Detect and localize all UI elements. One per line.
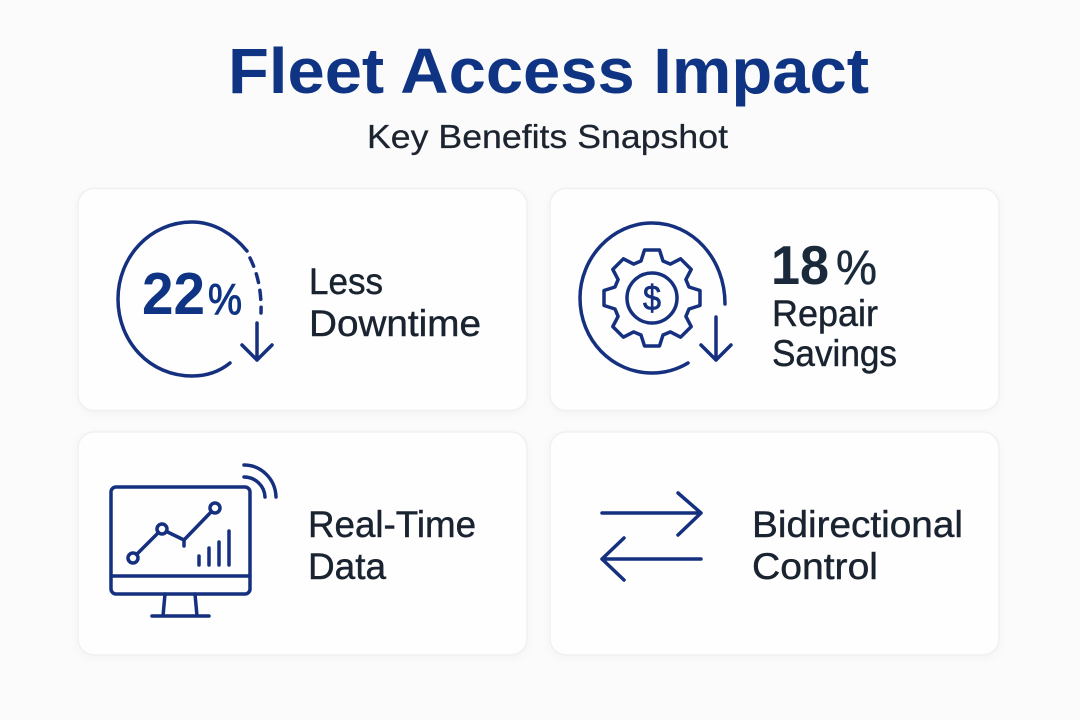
- label: real-time data: Real-Time: [308, 504, 476, 545]
- icon: monitor with chart and signal: [111, 465, 276, 616]
- title: Fleet Access Impact: [228, 35, 869, 107]
- label: repair savings: Savings: [772, 333, 897, 374]
- label: bidirectional control: Control: [752, 546, 878, 587]
- icon: two-way arrows: [602, 493, 701, 580]
- panel: real-time data: [78, 432, 527, 655]
- stat: 22%: 22: [142, 261, 205, 327]
- icon: gear with dollar and down arrow: [580, 223, 731, 373]
- stat: 18%: %: [836, 242, 877, 295]
- icon: circular gauge with down arrow: [118, 222, 272, 376]
- panel: repair savings: [550, 188, 999, 410]
- subtitle: Key Benefits Snapshot: [367, 118, 728, 155]
- panel: bidirectional control: [550, 432, 999, 655]
- stat: 18%: 18: [771, 234, 829, 296]
- label: less downtime: Downtime: [309, 303, 481, 344]
- label: repair savings: Repair: [772, 293, 878, 334]
- label: less downtime: Less: [309, 261, 383, 302]
- icon: gear with dollar and down arrow: $: [643, 279, 661, 318]
- label: real-time data: Data: [308, 546, 386, 587]
- panel: less downtime: [78, 188, 527, 410]
- stat: 22%: %: [208, 275, 242, 324]
- label: bidirectional control: Bidirectional: [752, 504, 963, 545]
